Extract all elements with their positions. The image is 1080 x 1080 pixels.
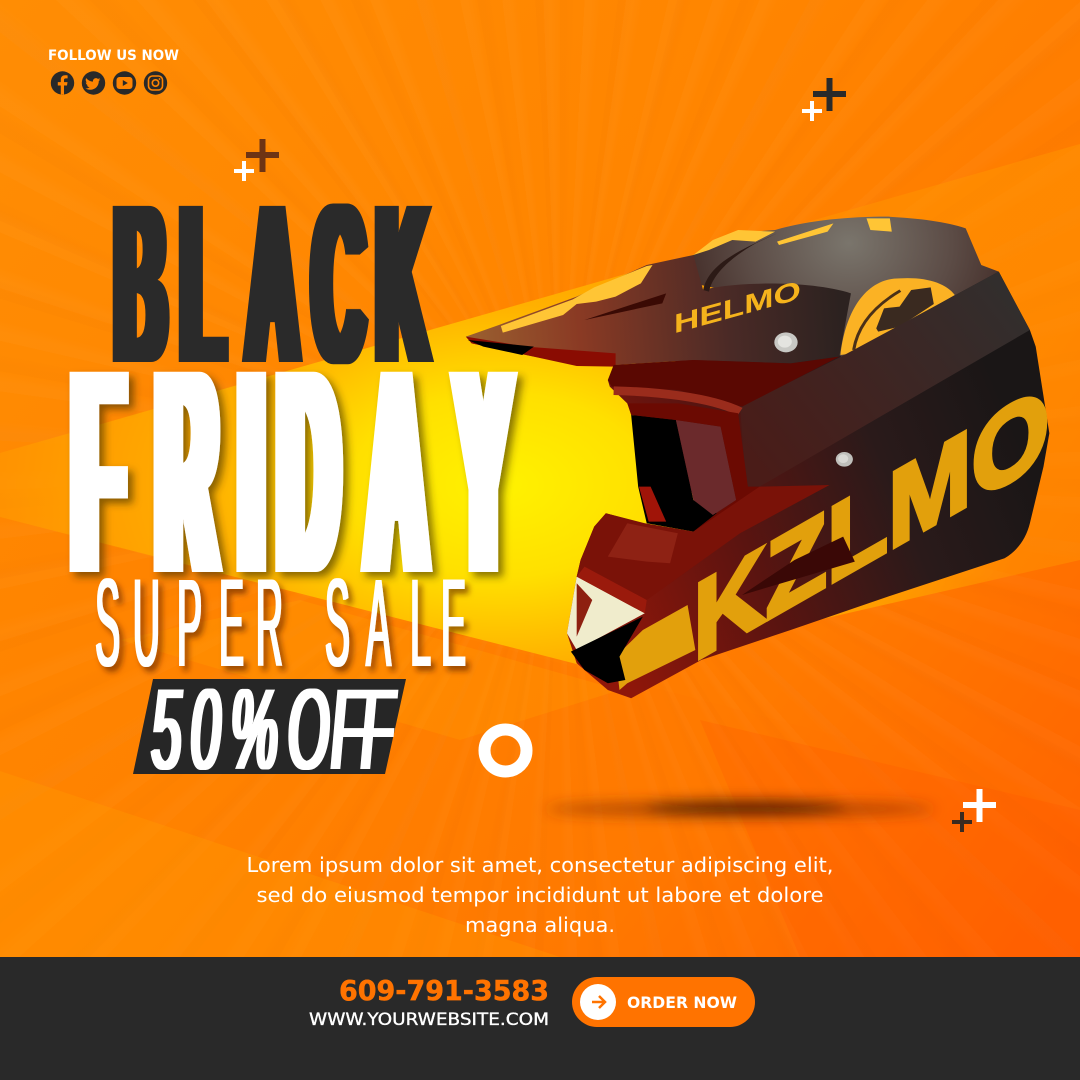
small logo: HELMO xyxy=(674,274,801,339)
title: friday: FRIDAY xyxy=(73,311,510,635)
chin black xyxy=(571,617,643,683)
body text: sed do eiusmod tempor incididunt ut labore et dolore xyxy=(256,883,824,907)
visor slot xyxy=(584,293,666,320)
visor xyxy=(466,255,851,365)
title: black: BLACK xyxy=(115,157,428,411)
helmet shell xyxy=(567,272,1049,698)
follow heading: FOLLOW US NOW xyxy=(48,48,179,64)
helmet illustration xyxy=(466,217,1049,698)
badge text: 50% OFF xyxy=(152,665,396,793)
eye opening xyxy=(631,415,717,532)
side vent bar xyxy=(639,487,666,522)
icon: twitter xyxy=(82,71,105,95)
phone number: 609-791-3583 xyxy=(339,974,549,1007)
mouth vent white xyxy=(567,577,645,650)
website: WWW.YOURWEBSITE.COM xyxy=(309,1010,549,1030)
icon: facebook xyxy=(51,71,74,95)
icon: arrow xyxy=(580,984,616,1020)
plus decoration top right xyxy=(802,78,846,121)
badge: 50% off xyxy=(133,665,406,793)
diagonal background bands xyxy=(0,144,1080,957)
plus decoration left xyxy=(234,139,279,181)
chin bar xyxy=(577,485,830,600)
goggle strap xyxy=(740,272,1030,487)
brow vent xyxy=(608,357,839,407)
side vent on logo xyxy=(742,537,855,595)
body text: Lorem ipsum dolor sit amet, consectetur adipiscing elit, xyxy=(246,853,834,877)
ground shadow xyxy=(545,801,935,816)
side screw xyxy=(836,452,853,467)
body text xyxy=(246,853,834,937)
visor scoop xyxy=(703,233,777,292)
visor yellow marks xyxy=(501,265,653,333)
crown yellow marks xyxy=(693,218,892,255)
helmet crown xyxy=(693,217,999,357)
ring decoration xyxy=(484,730,526,772)
chin red edge xyxy=(577,567,647,613)
icon: instagram xyxy=(144,71,167,95)
visor screw xyxy=(774,332,798,352)
button label: ORDER NOW xyxy=(627,993,737,1012)
chin yellow stripe xyxy=(616,605,695,690)
big helmet logo: KZLMO xyxy=(693,361,1049,685)
footer bar xyxy=(0,957,1080,1080)
button: order now xyxy=(572,977,755,1027)
goggle lens xyxy=(676,420,736,515)
chin vents xyxy=(608,523,678,563)
body text: magna aliqua. xyxy=(465,913,615,937)
plus decoration bottom right xyxy=(952,789,996,832)
title: super sale: SUPER SALE xyxy=(95,552,466,693)
social: follow us now xyxy=(48,48,179,95)
crown yellow logo xyxy=(840,278,955,355)
frame red xyxy=(627,403,760,532)
visor underside xyxy=(466,337,616,367)
icon: youtube xyxy=(113,71,136,95)
